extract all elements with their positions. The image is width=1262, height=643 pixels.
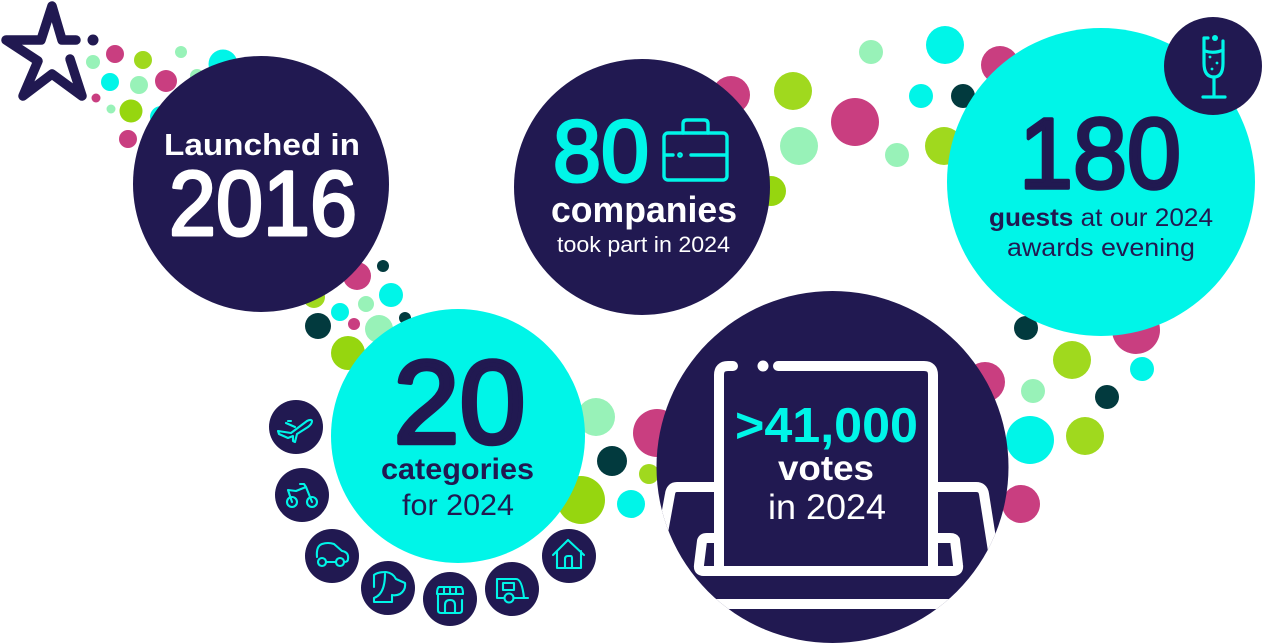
panel: votes laptop circle	[656, 291, 1008, 643]
panel: 180 guests	[947, 28, 1255, 336]
panel: 20 categories	[331, 309, 585, 563]
icon: star logo	[6, 6, 82, 96]
text: launched in: Launched in	[164, 127, 360, 162]
text: >41,000: >41,000	[735, 399, 918, 453]
icon: car	[305, 529, 359, 583]
icon: caravan	[485, 562, 539, 616]
text: 2016: 2016	[169, 153, 357, 255]
icon: briefcase	[664, 120, 727, 180]
icon: champagne glass badge	[1164, 17, 1262, 115]
text: companies: companies	[551, 189, 737, 230]
text: awards evening: awards evening	[1007, 234, 1195, 262]
panel: launched in 2016	[133, 56, 389, 312]
confetti dots: star trail	[86, 34, 238, 148]
confetti dots: middle left trail	[303, 260, 411, 370]
text: took part in 2024: took part in 2024	[557, 232, 730, 257]
icon: dog head	[361, 561, 415, 615]
text: votes: votes	[778, 449, 874, 488]
text: 80: 80	[553, 103, 649, 200]
text: in 2024: in 2024	[768, 488, 886, 527]
icon: house	[542, 529, 596, 583]
icon: dot	[758, 360, 768, 372]
text: guests at our 2024: guests at our 2024	[989, 204, 1213, 232]
text: 180: 180	[1019, 98, 1181, 210]
text: for 2024: for 2024	[402, 489, 514, 522]
panel: 80 companies	[514, 59, 770, 315]
text: 20: 20	[394, 337, 526, 469]
confetti dots: upper trail	[712, 26, 1019, 206]
confetti dots: right trail	[965, 306, 1160, 523]
text: categories: categories	[381, 453, 534, 486]
icon: ballot laptop	[658, 366, 996, 604]
icon: plane	[269, 400, 323, 454]
icon: shop	[423, 572, 477, 626]
icon: bicycle	[275, 468, 329, 522]
confetti dots: centre trail	[557, 398, 681, 524]
